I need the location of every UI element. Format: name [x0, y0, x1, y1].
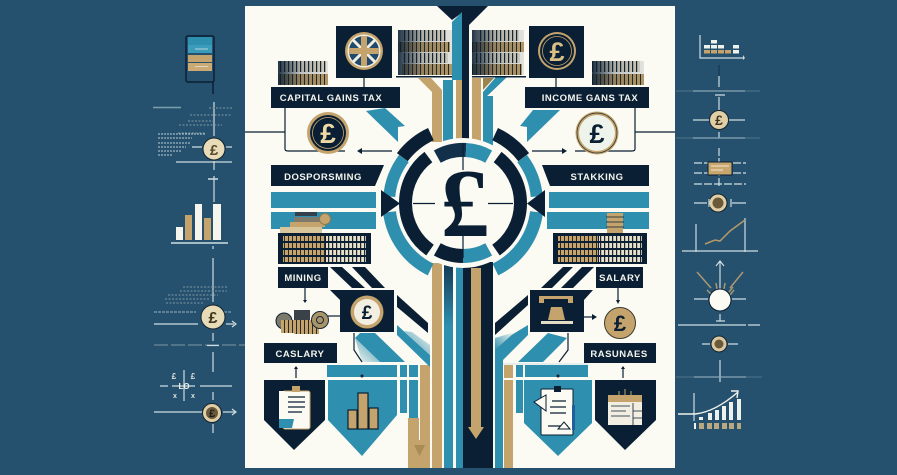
right sidebar: gold note: [694, 148, 746, 188]
right sidebar: sun icon: [678, 261, 760, 325]
crosshair lines: [413, 143, 513, 258]
right diagonal stripes: [495, 267, 594, 368]
icon panel: teal bar chart: [328, 380, 407, 456]
arrow: right double: [532, 148, 567, 154]
left sidebar: cross glyph: £: [172, 372, 177, 381]
left sidebar: cross glyph: LO: [178, 382, 190, 391]
left teal bars: [271, 192, 376, 229]
right teal bars: [547, 192, 649, 229]
left sidebar: bottom coin: [154, 392, 236, 433]
inner ring side segments: [406, 157, 520, 250]
icon: salary coin: £: [614, 311, 627, 336]
left sidebar: clipboard stack: [186, 36, 214, 94]
outer teal and navy arcs: [389, 134, 537, 270]
arrow: salary down: [616, 288, 620, 304]
heading: stakking: [542, 165, 649, 186]
central pound ring: [381, 134, 545, 270]
left sidebar: cross glyph: x: [191, 393, 195, 400]
heading: mining: MINING: [284, 273, 322, 284]
left sidebar: cross glyph: £: [191, 372, 196, 381]
small coins group: [276, 310, 340, 334]
heading: capital gains tax: CAPITAL GAINS TAX: [280, 93, 382, 104]
left dark box with coin: [330, 290, 394, 332]
left diagonal stripes: [330, 267, 430, 367]
heading: income gans tax: [525, 87, 649, 108]
arrow: right box to coin: [584, 314, 597, 320]
heading: rasunaes: [584, 343, 656, 363]
left dark box with coin: £: [362, 303, 373, 324]
inner ring top and bottom segments: [437, 150, 489, 256]
heading: caslary: [264, 343, 337, 363]
arrow: mining down: [303, 288, 307, 303]
connector: left coin: [245, 108, 345, 151]
stack rows: [278, 233, 371, 264]
panel: central sheet: [245, 6, 675, 468]
arrow: caslary up: [294, 366, 298, 378]
left sidebar: lower coin and lines: £: [209, 310, 218, 327]
right sidebar: coin small: [694, 194, 746, 212]
connector: right coin: [575, 108, 675, 151]
icon: right pound coin: £: [589, 119, 605, 149]
white halo: [398, 138, 528, 268]
connector: left box to bars: [354, 333, 362, 362]
heading: stakking: STAKKING: [571, 172, 623, 183]
arrow: left double: [357, 148, 392, 154]
left sidebar: bottom coin: £: [209, 408, 215, 420]
connector: right box to bars: [559, 333, 568, 362]
icon: right pound coin: [576, 112, 618, 154]
ribbon: left teal: [366, 108, 405, 142]
central vertical stripes: [408, 6, 513, 468]
heading: caslary: CASLARY: [275, 349, 325, 360]
heading: salary: [596, 267, 643, 288]
right large coin stack: [553, 213, 647, 264]
icon: left pound coin: [307, 112, 349, 154]
right sidebar: lower coin: [676, 336, 762, 382]
left teal header bars: [327, 365, 407, 378]
right header bars: [503, 364, 589, 378]
stack rows: [553, 233, 647, 264]
icon panel: navy calendar: [595, 380, 656, 450]
right top: pound coin box: £: [549, 37, 565, 67]
pound sign: £: [440, 150, 490, 258]
heading: rasunaes: RASUNAES: [590, 349, 648, 360]
icon: salary coin: [604, 308, 636, 338]
icon: left pound coin: £: [320, 118, 336, 149]
right top: coin stack tall: [472, 30, 526, 78]
left top: union flag coin box: [336, 26, 392, 87]
left sidebar: upper coin and lines: [153, 102, 233, 202]
right dark box with scales: [530, 290, 593, 332]
left sidebar: cross glyph: [160, 370, 232, 401]
icon panel: navy clipboard: [264, 380, 325, 450]
right sidebar: line chart: [682, 218, 758, 252]
arrow: rasunaes up: [621, 366, 625, 378]
heading: income gans tax: INCOME GANS TAX: [542, 93, 638, 104]
heading: mining: [278, 267, 328, 288]
icon panel: teal document: [516, 380, 592, 456]
left large coin stack: [278, 212, 371, 264]
left top: coin stack tall: [396, 30, 452, 78]
left sidebar: lower coin and lines: [154, 246, 245, 372]
heading: capital gains tax: [271, 87, 400, 108]
left sidebar: bar chart: [171, 204, 228, 243]
right sidebar: coin with lines: £: [715, 112, 723, 128]
heading: dosporsming: [271, 165, 384, 186]
right sidebar: mini chart: [700, 35, 745, 60]
pointers: [381, 190, 400, 217]
left sidebar: cross glyph: x: [173, 393, 177, 400]
right top: pound coin box: [529, 26, 584, 87]
heading: dosporsming: DOSPORSMING: [284, 172, 362, 183]
left sidebar: upper coin and lines: £: [210, 142, 219, 159]
right sidebar: growth chart: [678, 391, 741, 429]
left top: coin stack small: [278, 61, 328, 85]
right sidebar: coin with lines: [676, 65, 760, 138]
right top: coin stack small: [592, 61, 644, 85]
heading: salary: SALARY: [599, 273, 641, 284]
ribbon: right teal: [520, 110, 560, 142]
